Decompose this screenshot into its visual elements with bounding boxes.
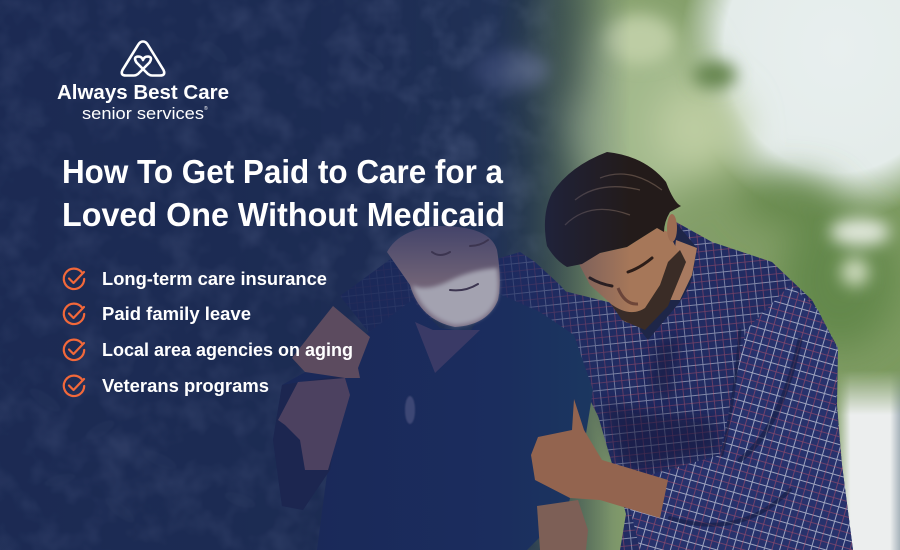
dark open collar [640, 224, 697, 340]
navy shirt [273, 292, 593, 550]
older man [273, 226, 668, 550]
logo name: Always Best Care [57, 81, 229, 104]
item: local area agencies on aging: Local area agencies on aging [102, 339, 353, 360]
head [387, 226, 500, 327]
item: paid family leave: Paid family leave [102, 303, 251, 324]
item: long-term care insurance: Long-term care insurance [102, 268, 327, 289]
white beard [412, 268, 498, 325]
eyes and brow [590, 258, 652, 286]
mottled leaves [0, 0, 560, 550]
title: How To Get Paid to Care for a [62, 154, 503, 191]
sleeve [628, 285, 853, 550]
logo tagline: senior services [82, 105, 204, 123]
older man's forearm and hand [278, 378, 350, 470]
arm around shoulders [340, 252, 600, 420]
item: veterans programs: Veterans programs [102, 375, 269, 396]
shirt folds [670, 330, 800, 525]
pale wall lower right [834, 370, 900, 550]
closed eyes and mouth [432, 240, 488, 290]
logo icon [122, 42, 164, 76]
logo [57, 42, 229, 123]
collar [676, 240, 713, 328]
younger man's arm and hand [292, 306, 370, 378]
checklist [64, 268, 353, 396]
ear [667, 214, 677, 242]
older man's upper arm [537, 500, 588, 550]
button marks [405, 396, 415, 424]
man in plaid shirt [340, 152, 853, 550]
sleeve shade [273, 375, 345, 510]
beard [611, 250, 686, 330]
face [578, 228, 680, 327]
shirt [560, 222, 853, 550]
nose shadow [618, 288, 638, 304]
skin at open collar [415, 322, 480, 373]
registered mark: ® [204, 105, 208, 112]
shirt shadows [600, 335, 720, 472]
title: Loved One Without Medicaid [62, 197, 505, 234]
title [62, 154, 505, 234]
neck [668, 240, 697, 300]
hair [545, 152, 681, 267]
foliage on the left [13, 38, 387, 526]
younger man's hand on shoulder [531, 399, 668, 518]
